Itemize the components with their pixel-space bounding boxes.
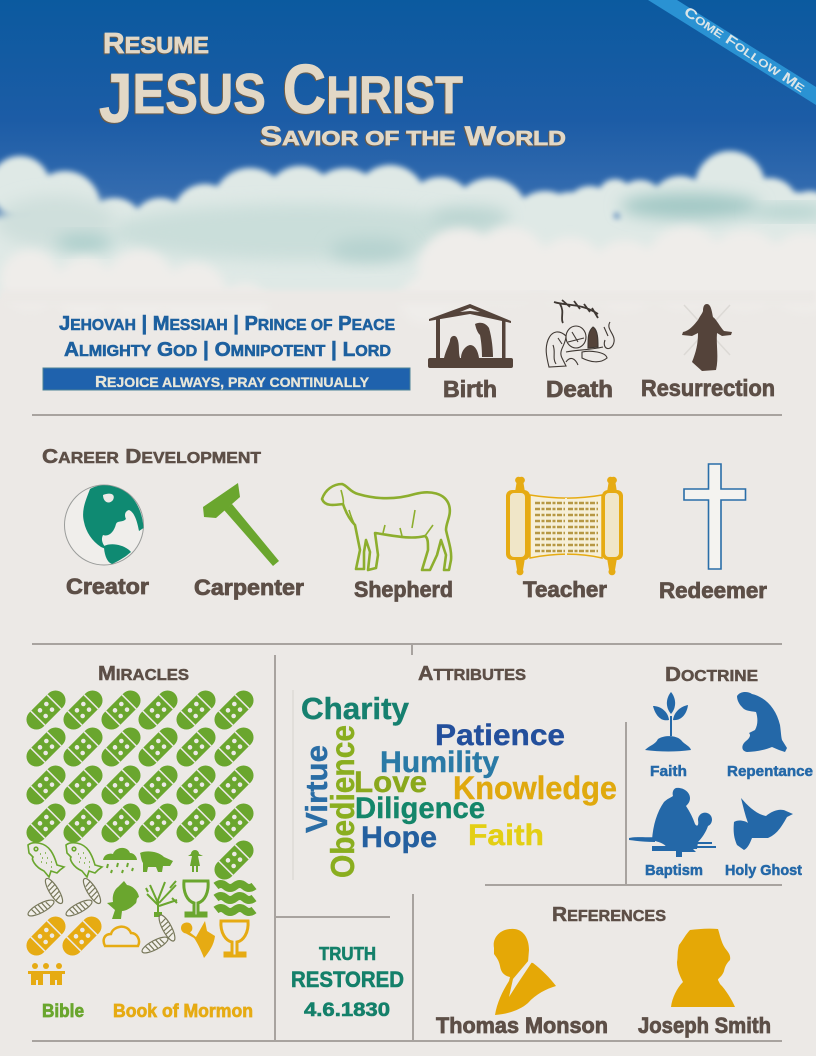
icon: death empty tomb bbox=[546, 300, 614, 367]
panel: names of Christ: REJOICE ALWAYS, PRAY CONTINUALLY bbox=[95, 374, 369, 391]
fish and loaves bbox=[26, 843, 104, 919]
word cloud: Love bbox=[354, 766, 427, 799]
icon: faith seedling bbox=[645, 692, 691, 752]
word cloud: Hope bbox=[361, 821, 437, 854]
reference names: Joseph Smith bbox=[638, 1013, 771, 1038]
bandage grid bbox=[22, 686, 258, 884]
icon: resurrection figure bbox=[682, 304, 732, 371]
icon: baptism bbox=[629, 788, 716, 857]
career labels bbox=[66, 574, 767, 603]
reference names bbox=[436, 1013, 771, 1038]
icon: gold chalice bbox=[221, 921, 248, 956]
title block: ESUS bbox=[132, 62, 266, 126]
word cloud: Charity bbox=[301, 691, 410, 726]
panel: names of Christ bbox=[43, 313, 410, 391]
heading: career development: CAREER DEVELOPMENT bbox=[42, 446, 262, 468]
career labels: Carpenter bbox=[194, 575, 304, 600]
clouds bbox=[0, 151, 816, 327]
callout: truth restored: 4.6.1830 bbox=[304, 1000, 390, 1021]
birth death resurrection labels bbox=[443, 375, 775, 402]
title block: J bbox=[99, 59, 132, 137]
icon: water waves bbox=[216, 884, 254, 912]
icon: birth nativity bbox=[428, 304, 513, 368]
title block: CHRIST bbox=[285, 50, 485, 128]
corner ribbon bbox=[648, 0, 816, 105]
icon: torah scroll bbox=[506, 477, 623, 575]
panel: names of Christ: ALMIGHTY GOD | OMNIPOTENT | LORD bbox=[64, 339, 391, 361]
icon: rain cloud bbox=[103, 848, 137, 873]
icon: green chalice bbox=[184, 881, 208, 916]
heading: miracles: MIRACLES bbox=[98, 663, 189, 685]
word cloud: Patience bbox=[435, 719, 565, 752]
icon: holy ghost dove bbox=[734, 798, 793, 850]
birth death resurrection labels: Birth bbox=[443, 376, 497, 402]
icon: sheep bbox=[322, 484, 451, 570]
heading: doctrine: DOCTRINE bbox=[665, 664, 758, 686]
doctrine labels: Faith bbox=[650, 763, 687, 780]
doctrine labels: Baptism bbox=[645, 862, 703, 879]
icon: gold cloud bbox=[104, 927, 139, 946]
icon: Joseph Smith silhouette bbox=[671, 929, 735, 1007]
icon: angel bbox=[181, 921, 215, 958]
career labels: Teacher bbox=[523, 577, 607, 602]
legend labels: Book of Mormon bbox=[113, 1001, 253, 1021]
icon: gold loaves bbox=[140, 913, 178, 956]
word cloud: Knowledge bbox=[453, 770, 617, 806]
gold bandages bbox=[22, 912, 106, 960]
panel: names of Christ: JEHOVAH | MESSIAH | PRINCE OF PEACE bbox=[59, 313, 395, 335]
icon: globe bbox=[64, 485, 144, 565]
career labels: Redeemer bbox=[659, 578, 767, 603]
icon: pig bbox=[140, 851, 173, 872]
career labels: Creator bbox=[66, 574, 149, 599]
word cloud: Diligence bbox=[355, 792, 485, 825]
ribbon text: COME FOLLOW ME bbox=[681, 3, 808, 95]
heading: attributes: ATTRIBUTES bbox=[418, 663, 526, 685]
title block: SAVIOR OF THE W ORLD bbox=[260, 121, 566, 151]
title block bbox=[99, 28, 566, 151]
callout: truth restored: TRUTH bbox=[319, 944, 376, 964]
icon: cross bbox=[684, 464, 746, 569]
sky background bbox=[0, 0, 816, 240]
word cloud: Humility bbox=[380, 746, 499, 779]
word cloud: Faith bbox=[468, 819, 544, 852]
doctrine labels: Holy Ghost bbox=[725, 862, 802, 879]
reference names: Thomas Monson bbox=[436, 1013, 608, 1038]
doctrine labels: Repentance bbox=[727, 763, 813, 780]
birth death resurrection labels: Resurrection bbox=[641, 375, 775, 401]
icon: Thomas Monson silhouette bbox=[494, 929, 556, 1015]
legend labels: Bible bbox=[42, 1001, 84, 1021]
word cloud: Virtue bbox=[299, 745, 334, 833]
word cloud bbox=[299, 691, 617, 878]
panel: attributes bbox=[299, 663, 617, 878]
legend labels bbox=[42, 1001, 253, 1021]
panel: doctrine bbox=[629, 664, 813, 879]
heading: references: REFERENCES bbox=[552, 904, 666, 926]
birth death resurrection labels: Death bbox=[546, 376, 613, 402]
icon: three people bbox=[28, 963, 65, 985]
callout: truth restored: RESTORED bbox=[291, 967, 404, 992]
career labels: Shepherd bbox=[354, 577, 453, 602]
panel: references bbox=[436, 904, 771, 1038]
word cloud: Obedience bbox=[324, 725, 361, 878]
icon: repentance kneeling figure bbox=[737, 692, 787, 752]
icon: tree bbox=[146, 881, 177, 917]
icon: hammer bbox=[203, 483, 279, 566]
doctrine labels bbox=[645, 763, 813, 879]
callout: truth restored bbox=[291, 944, 404, 1021]
icon: girl bbox=[188, 850, 203, 872]
panel: miracles bbox=[22, 663, 258, 1021]
title block: RESUME bbox=[103, 28, 209, 60]
icon: angler fish bbox=[107, 881, 139, 919]
